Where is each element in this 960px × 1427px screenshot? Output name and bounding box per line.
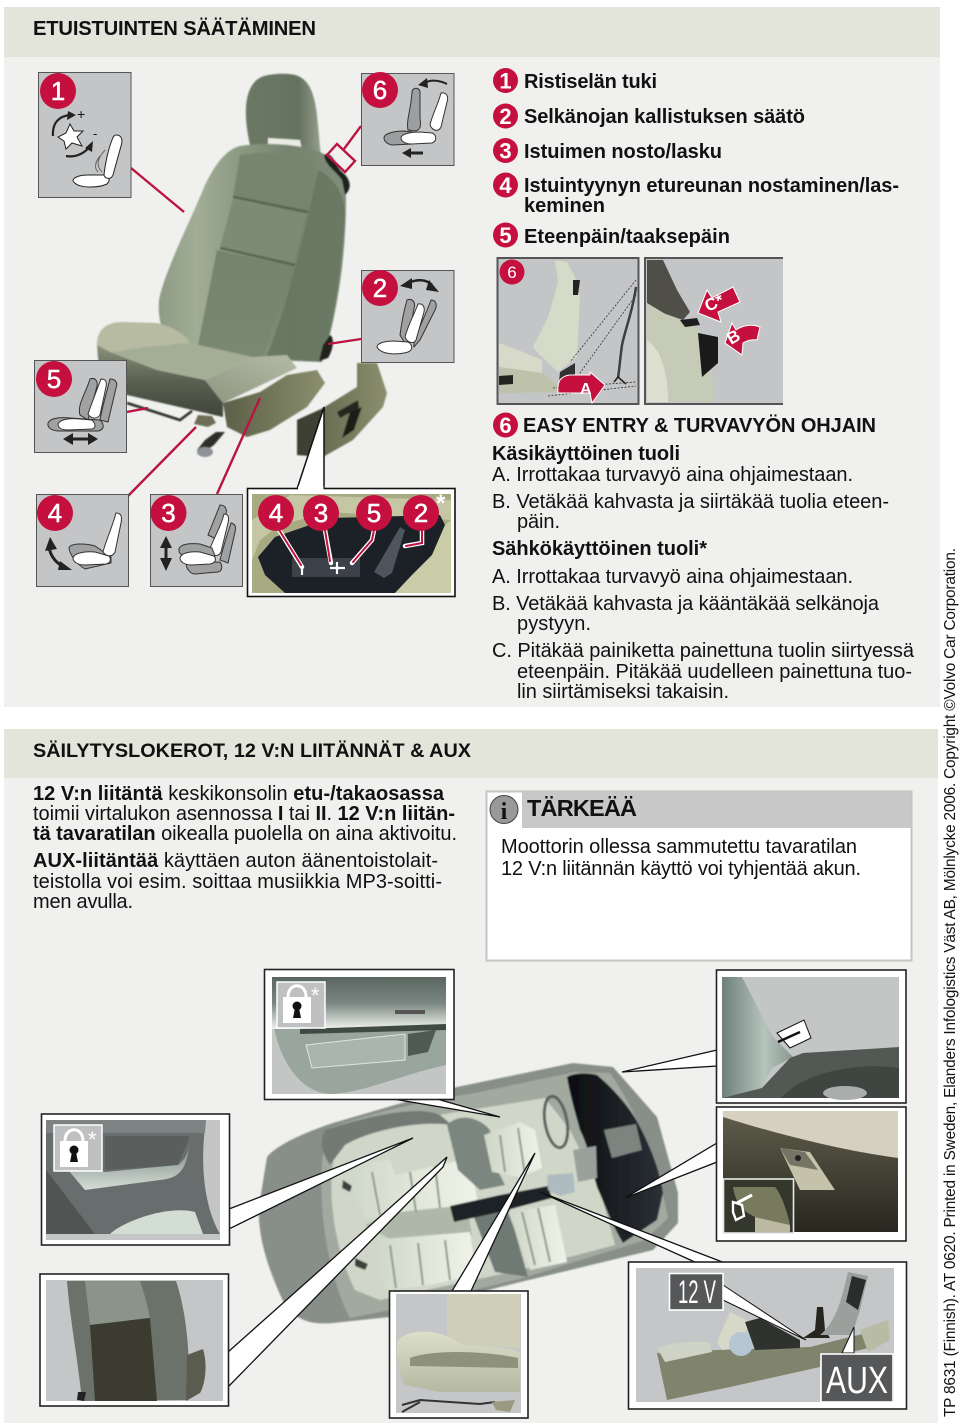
important notice box (486, 792, 912, 960)
icon panel 2: backrest tilt (362, 270, 454, 362)
detail box: glove compartment (716, 1107, 906, 1241)
badge 2: 2 (373, 273, 387, 303)
heading band: front seat adjustment: ETUISTUINTEN SÄÄTÄMINEN (33, 17, 316, 40)
detail box: front seat underside (390, 1291, 528, 1418)
numbered legend list: Ristiselän tuki (524, 71, 657, 93)
text block: 12 V sockets and AUX: toimii virtalukon asennossa I tai II. 12 V:n liitän- (33, 803, 455, 825)
label 12 V (670, 1274, 723, 1310)
numbered legend list: Selkänojan kallistuksen säätö (524, 106, 805, 128)
section 6 text: easy entry and belt guide (492, 412, 915, 703)
badge 6: 6 (507, 263, 517, 282)
arrow A: A (580, 381, 592, 398)
AUX pointer (842, 1327, 854, 1353)
important notice box: 12 V:n liitännän käyttö voi tyhjentää akun. (501, 858, 861, 880)
vertical imprint text: TP 8631 (Finnish). AT 0620. Printed in Sweden, Elanders Infologistics Väst AB, Mölnlycke 2006. Copyright ©Volvo Car Corporation. (942, 548, 959, 1417)
badges: 2 (414, 498, 428, 528)
icon panel 1: lumbar support (38, 72, 131, 198)
numbered legend list: Eteenpäin/taaksepäin (524, 226, 730, 248)
callout wedge to switch panel (297, 407, 324, 489)
important notice box: Moottorin ollessa sammutettu tavaratilan (501, 836, 857, 858)
upper panel background (4, 7, 940, 707)
numbered legend list: 4 (499, 173, 512, 198)
numbered legend list: Istuintyynyn etureunan nostaminen/las- (524, 175, 899, 197)
badges: 5 (367, 498, 381, 528)
icon panel 5: forward/back (34, 360, 126, 452)
asterisk: * (436, 490, 446, 517)
badge 4: 4 (48, 498, 62, 528)
text block: 12 V sockets and AUX (33, 783, 457, 913)
arrow C (698, 287, 740, 322)
switch panel inset (248, 488, 455, 596)
numbered legend list: 1 (499, 68, 512, 94)
icon panel 3: seat height (150, 494, 242, 586)
badges: 4 (269, 498, 283, 528)
detail box: rear door pocket with lock (42, 1114, 230, 1245)
numbered legend list: 5 (499, 223, 512, 248)
label AUX: AUX (826, 1360, 888, 1402)
section 6 text: easy entry and belt guide: A. Irrottakaa turvavyö aina ohjaimestaan. (492, 464, 853, 486)
section 6 text: easy entry and belt guide: C. Pitäkää painiketta painettuna tuolin siirtyessä (492, 640, 915, 662)
section 6 text: easy entry and belt guide: pystyyn. (517, 613, 591, 635)
section 6 text: easy entry and belt guide: B. Vetäkää kahvasta ja kääntäkää selkänoja (492, 593, 880, 615)
photo: belt guide controls B and C (644, 258, 783, 404)
arrow C: C* (702, 290, 727, 316)
icon panel 1: lumbar support: + (77, 106, 85, 122)
icon: lock (277, 982, 325, 1028)
section 6 text: easy entry and belt guide: päin. (517, 511, 560, 533)
detached seat side panel with switches (297, 363, 387, 457)
section 6 text: easy entry and belt guide: eteenpäin. Pitäkää uudelleen painettuna tuo- (517, 661, 912, 683)
text block: 12 V sockets and AUX: tä tavaratilan oikealla puolella on aina aktivoitu. (33, 823, 457, 845)
numbered legend list: Istuimen nosto/lasku (524, 141, 722, 163)
car interior from above (259, 1063, 678, 1323)
icon: lock: * (311, 983, 320, 1008)
detail box: seat back pocket (40, 1274, 228, 1406)
text block: 12 V sockets and AUX: men avulla. (33, 891, 133, 913)
badge 3: 3 (161, 498, 176, 528)
badges: 3 (314, 498, 328, 528)
photo: seat tilting forward with belt guide (498, 258, 638, 404)
section 6 text: easy entry and belt guide: EASY ENTRY & TURVAVYÖN OHJAIN (523, 414, 876, 437)
label 12 V: 12 V (678, 1274, 716, 1310)
numbered legend list: 2 (499, 104, 512, 129)
arrow B (724, 323, 760, 355)
icon panel 4: cushion front edge (36, 494, 128, 586)
section 6 text: easy entry and belt guide: Sähkökäyttöinen tuoli* (492, 538, 707, 560)
badge 1: 1 (51, 76, 65, 106)
detail box: windshield pillar ticket holder (716, 970, 906, 1103)
badge 6 (500, 260, 524, 284)
text block: 12 V sockets and AUX: AUX-liitäntää käyttäen auton äänentoistolait- (33, 850, 438, 872)
important notice box: TÄRKEÄÄ (527, 795, 637, 821)
callout wedges from car to detail boxes (228, 1050, 725, 1387)
icon: lock (54, 1125, 102, 1171)
text block: 12 V sockets and AUX: 12 V:n liitäntä keskikonsolin etu-/takaosassa (33, 783, 445, 805)
arrow A (558, 372, 605, 403)
numbered legend list: keminen (524, 195, 605, 217)
main seat illustration (97, 74, 350, 457)
section 6 text: easy entry and belt guide: lin siirtämiseksi takaisin. (517, 681, 729, 703)
section 6 text: easy entry and belt guide: B. Vetäkää kahvasta ja siirtäkää tuolia eteen- (492, 491, 889, 513)
heading band: storage and sockets (4, 729, 938, 778)
arrow B: B (724, 326, 744, 348)
lower panel background (4, 729, 938, 1423)
heading band: storage and sockets: SÄILYTYSLOKEROT, 12 V:N LIITÄNNÄT & AUX (33, 739, 472, 762)
badge 5: 5 (47, 364, 61, 394)
icon panel 1: lumbar support: - (93, 126, 97, 141)
section 6 text: easy entry and belt guide: A. Irrottakaa turvavyö aina ohjaimestaan. (492, 566, 853, 588)
badge 6: 6 (373, 75, 387, 105)
badges (258, 495, 439, 531)
pointer lines (276, 525, 422, 567)
detail box: centre console sockets (628, 1262, 906, 1409)
12 V pointer (723, 1285, 806, 1340)
icon: information (490, 796, 518, 825)
red leader lines (127, 126, 361, 496)
section 6 text: easy entry and belt guide: 6 (499, 413, 512, 438)
front seats (447, 1118, 567, 1277)
section 6 text: easy entry and belt guide: Käsikäyttöinen tuoli (492, 443, 680, 465)
numbered legend list: 3 (499, 138, 512, 164)
detail box: front door pocket with lock (264, 970, 454, 1100)
icon: lock: * (88, 1127, 97, 1152)
icon panel 6: easy entry (362, 72, 454, 166)
heading band: front seat adjustment (4, 7, 940, 57)
rear seat (340, 1158, 478, 1290)
dashboard (567, 1073, 663, 1243)
inset: key in lock (724, 1179, 794, 1233)
numbered legend list (493, 68, 899, 248)
icon: information: i (501, 799, 508, 825)
text block: 12 V sockets and AUX: teistolla voi esim. soittaa musiikkia MP3-soitti- (33, 871, 442, 893)
